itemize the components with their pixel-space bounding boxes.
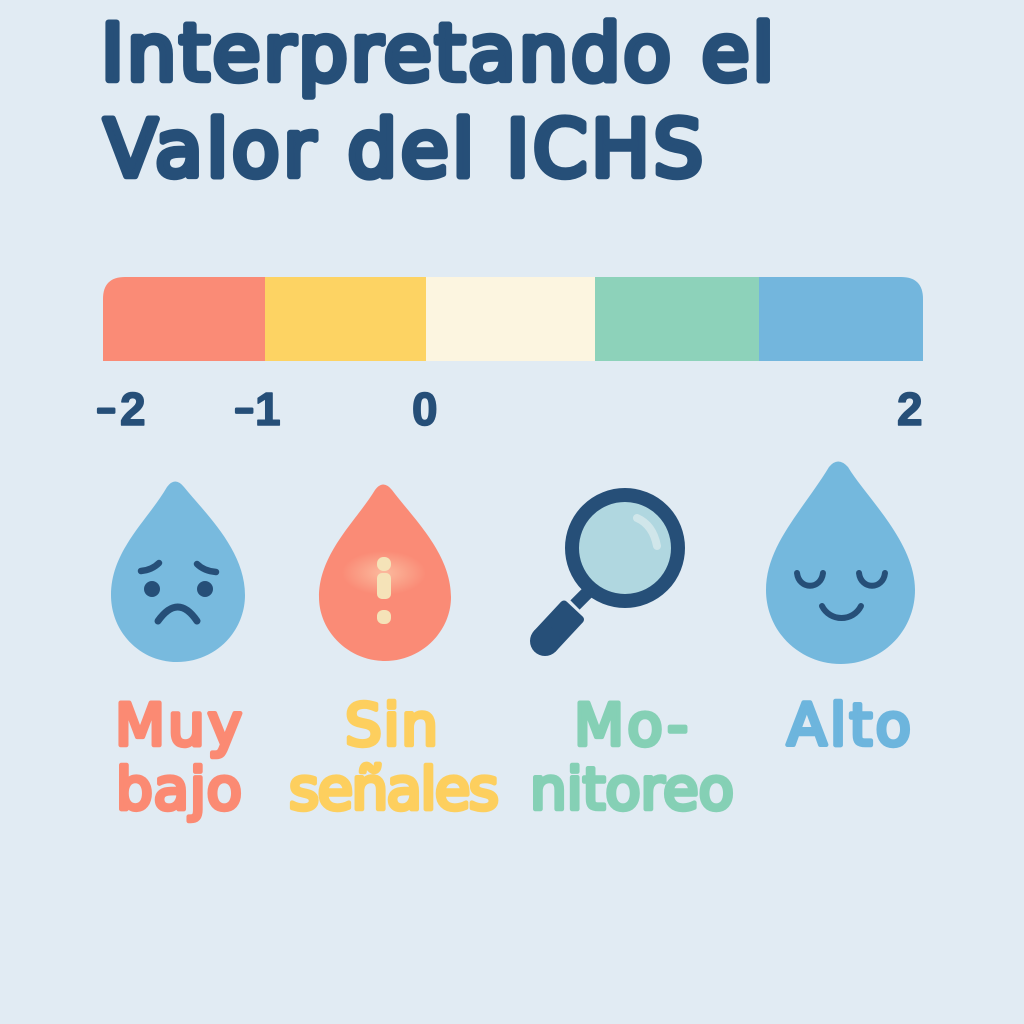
label: Monitoreo: Mo- bbox=[574, 691, 688, 759]
title: Valor del ICHS bbox=[104, 105, 703, 195]
icon: magnifying glass bbox=[530, 495, 678, 656]
scale labels: − bbox=[235, 393, 253, 428]
label: Alto: Alto bbox=[787, 691, 911, 759]
label: Sin señales bbox=[289, 691, 499, 823]
icon: calm water drop bbox=[766, 462, 915, 664]
label: Sin señales: señales bbox=[289, 755, 499, 823]
label: Muy bajo: Muy bbox=[115, 691, 242, 759]
label: Sin señales: Sin bbox=[345, 691, 438, 759]
scale labels: 2 bbox=[897, 383, 923, 435]
label: Muy bajo bbox=[115, 691, 242, 823]
title: Interpretando el bbox=[101, 9, 774, 99]
label: Monitoreo: nitoreo bbox=[530, 755, 734, 823]
icon: sad water drop bbox=[111, 482, 245, 662]
label: Muy bajo: bajo bbox=[116, 755, 242, 823]
color scale bar bbox=[103, 277, 923, 361]
scale labels bbox=[97, 383, 923, 435]
scale labels: 0 bbox=[412, 383, 438, 435]
scale labels: − bbox=[97, 393, 115, 428]
scale labels: 2 bbox=[120, 383, 146, 435]
icon: warning water drop bbox=[319, 484, 451, 661]
label: Monitoreo bbox=[530, 691, 734, 823]
title bbox=[101, 9, 774, 195]
scale labels: 1 bbox=[255, 383, 281, 435]
